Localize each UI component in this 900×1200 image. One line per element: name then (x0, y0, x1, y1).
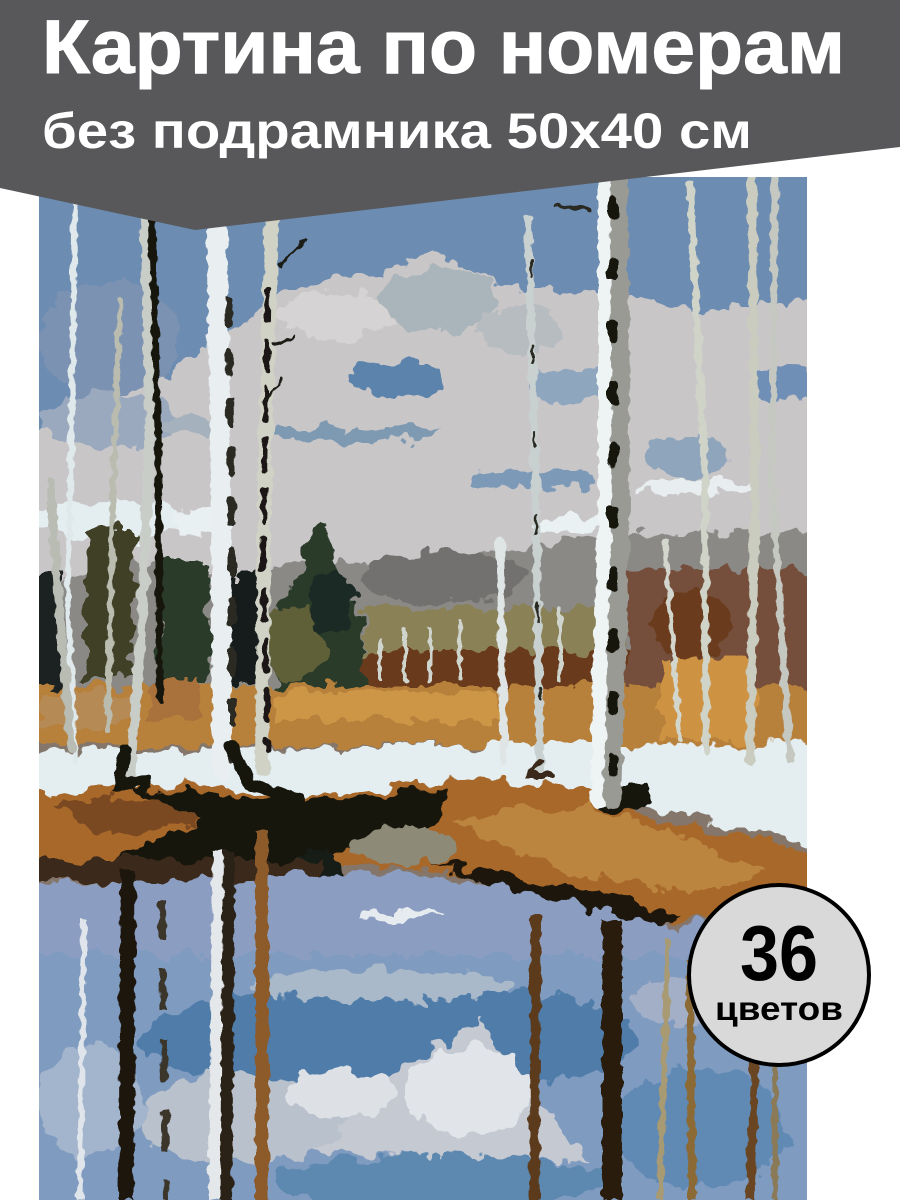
snow bank (20, 742, 830, 850)
subtitle: без подрамника 50х40 см (42, 103, 752, 159)
painting underlay (39, 740, 807, 934)
reflected trunks (80, 830, 775, 1200)
distant forest (20, 520, 830, 700)
clouds (20, 252, 830, 600)
header banner (0, 0, 900, 230)
colour count badge (689, 885, 869, 1065)
badge number: 36 (740, 909, 818, 997)
painting: birch trees by a spring lake (20, 160, 830, 1200)
brown shore (20, 778, 830, 935)
birch trunks (50, 178, 790, 800)
title: Картина по номерам (42, 5, 845, 90)
golden reeds (20, 660, 830, 746)
sky (39, 177, 807, 430)
badge label: цветов (715, 990, 843, 1027)
lake reflection (20, 872, 830, 1200)
